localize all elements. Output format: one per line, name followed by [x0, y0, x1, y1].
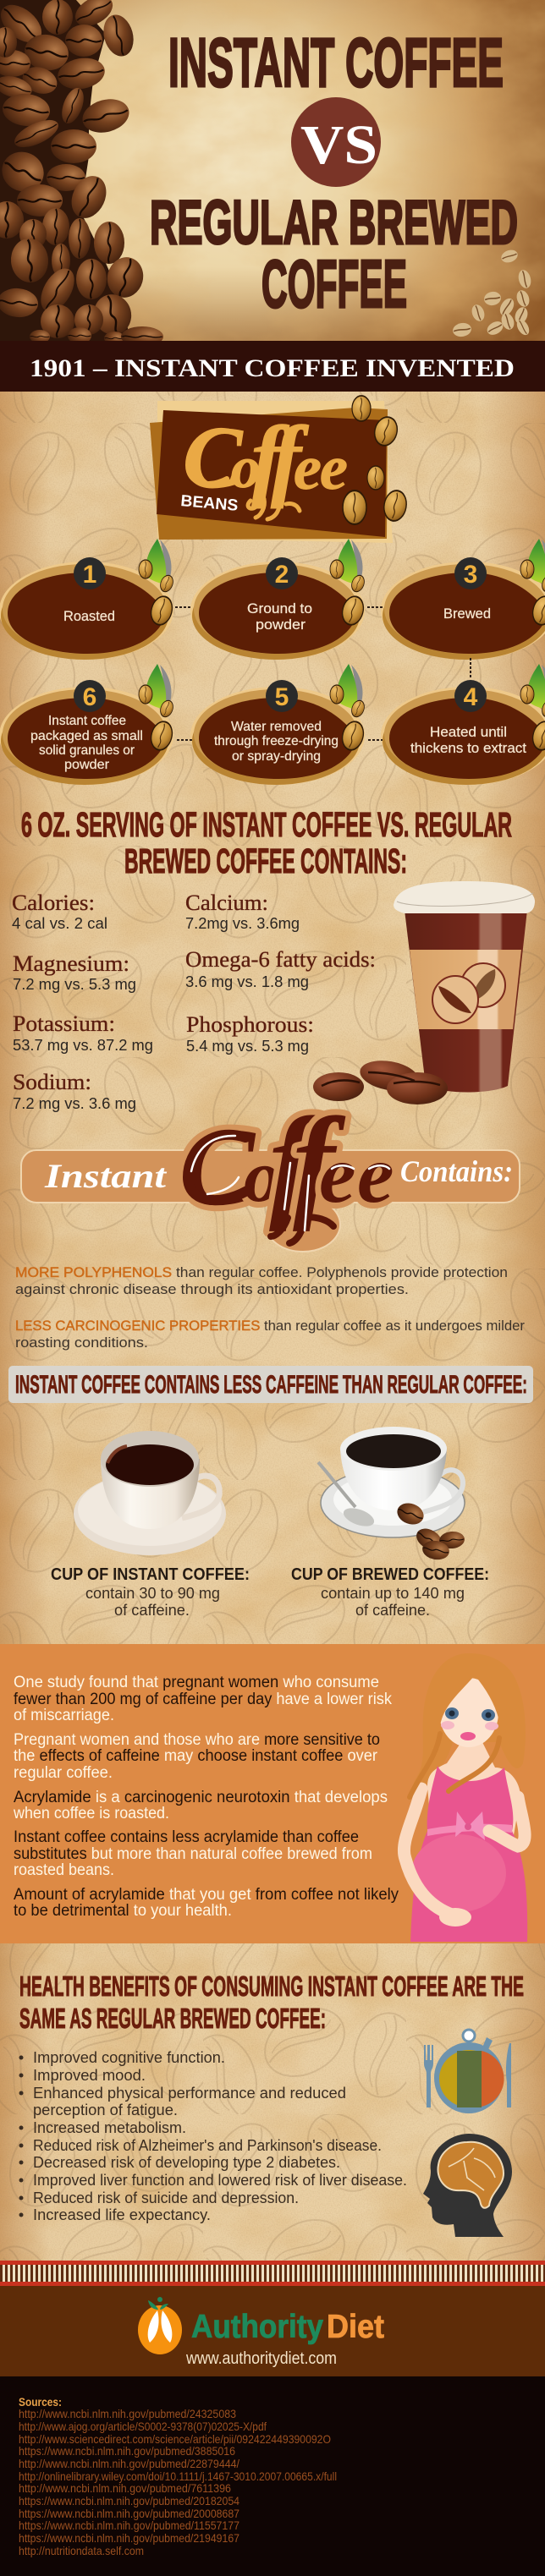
vs badge: VS [300, 114, 377, 176]
step 6: powder [64, 758, 110, 772]
health benefits list [19, 2049, 407, 2223]
step 5: through freeze-drying [214, 734, 339, 748]
pregnancy text: Instant coffee contains less acrylamide than coffee [14, 1828, 359, 1846]
step 4: thickens to extract [410, 741, 526, 756]
brewed cup caption: of caffeine. [355, 1602, 430, 1619]
nutrient: potassium: Potassium: [13, 1011, 115, 1036]
pregnancy text: Pregnant women and those who are more sensitive to [14, 1731, 380, 1749]
health benefits list: Improved liver function and lowered risk of liver disease. [33, 2172, 407, 2189]
nutrient: phosphorous: 5.4 mg vs. 5.3 mg [186, 1038, 309, 1055]
nutrient: magnesium [13, 951, 136, 993]
polyphenols text [15, 1264, 508, 1297]
polyphenols text: against chronic disease through its antioxidant properties. [15, 1281, 409, 1297]
pregnancy text [13, 1674, 399, 1920]
health benefits list: Improved cognitive function. [33, 2049, 225, 2066]
nutrient: phosphorous: Phosphorous: [186, 1012, 314, 1037]
carcinogenic text [15, 1318, 525, 1351]
pregnancy text: Amount of acrylamide that you get from coffee not likely [14, 1886, 399, 1904]
big coffee lettering: f [269, 1092, 322, 1232]
step connectors [175, 607, 471, 740]
sources block: http://www.ajog.org/article/S0002-9378(07)02025-X/pdf [19, 2420, 267, 2433]
step 5: Water removed [231, 720, 322, 734]
health benefits list: Reduced risk of Alzheimer's and Parkinson's disease. [33, 2137, 382, 2154]
brewed cup caption [291, 1565, 489, 1619]
polyphenols text: MORE POLYPHENOLS than regular coffee. Polyphenols provide protection [15, 1264, 508, 1280]
nutrient: calories: Calories: [12, 891, 95, 915]
carcinogenic text: roasting conditions. [15, 1335, 148, 1351]
nutrient: calcium [185, 891, 300, 932]
sources block: https://www.ncbi.nlm.nih.gov/pubmed/3885016 [19, 2444, 235, 2458]
nutrient: calories: 4 cal vs. 2 cal [12, 915, 107, 932]
coffee script lettering: e [294, 434, 322, 503]
nutrient: calcium: 7.2mg vs. 3.6mg [185, 915, 300, 932]
nutrient: omega-6 [185, 947, 376, 990]
instant coffee contains banner [21, 1092, 520, 1252]
beans label: BEANS [180, 492, 239, 515]
title [150, 25, 518, 321]
footer brand band [0, 2286, 545, 2376]
sources block: http://www.ncbi.nlm.nih.gov/pubmed/7611396 [19, 2481, 231, 2495]
coffee beans pile [0, 0, 163, 347]
nutrient: omega-6: Omega-6 fatty acids: [185, 947, 376, 972]
pregnant woman illustration [404, 1653, 527, 1942]
vs badge [291, 97, 381, 187]
sources block [0, 2376, 545, 2576]
nutrient: omega-6: 3.6 mg vs. 1.8 mg [185, 973, 309, 990]
step 2: powder [256, 617, 306, 633]
nutrient: potassium: 53.7 mg vs. 87.2 mg [13, 1037, 153, 1054]
health benefits list: Enhanced physical performance and reduced [33, 2085, 346, 2102]
brewed cup caption: contain up to 140 mg [321, 1585, 465, 1602]
step 5: or spray-drying [232, 749, 321, 764]
step 6: packaged as small [30, 729, 143, 743]
big coffee lettering [180, 1092, 394, 1243]
nutrition heading [21, 805, 512, 880]
step 3: 3 [464, 561, 477, 589]
decorative stripe band [0, 2261, 545, 2286]
step 4: Heated until [430, 725, 507, 740]
nutrient: sodium: 7.2 mg vs. 3.6 mg [13, 1095, 136, 1112]
coffee script lettering: C [184, 409, 244, 507]
website url: www.authoritydiet.com [185, 2349, 337, 2368]
big coffee lettering: C [180, 1104, 256, 1229]
faded beans decoration [452, 248, 533, 338]
step 3 [381, 539, 545, 660]
step 1 [0, 539, 175, 660]
step 1: Roasted [63, 608, 115, 624]
coffee script lettering: f [271, 408, 309, 509]
coffee script lettering: f [251, 408, 289, 509]
pregnancy text: when coffee is roasted. [13, 1805, 169, 1822]
instant coffee cup [74, 1431, 226, 1555]
coffee script lettering [184, 408, 348, 519]
nutrient: magnesium: Magnesium: [13, 951, 129, 976]
takeaway cup illustration [313, 881, 535, 1104]
coffee script lettering: o [231, 436, 261, 501]
instant label: Instant [44, 1157, 168, 1195]
instant cup caption: CUP OF INSTANT COFFEE: [51, 1565, 250, 1584]
pregnancy text: the effects of caffeine may choose instant coffee over [14, 1747, 378, 1765]
step 5: 5 [275, 683, 289, 711]
step 2 [190, 539, 366, 660]
instant cup caption [51, 1565, 250, 1619]
big coffee lettering: e [319, 1129, 355, 1220]
step 2: 2 [275, 561, 289, 589]
step 3: Brewed [443, 606, 491, 622]
sources block: http://nutritiondata.self.com [19, 2544, 144, 2557]
pregnancy text: fewer than 200 mg of caffeine per day have a lower risk [14, 1691, 392, 1708]
brewed coffee cup [318, 1427, 465, 1562]
big coffee lettering: f [293, 1092, 346, 1232]
coffee script lettering: e [320, 434, 348, 503]
step 4: 4 [464, 683, 478, 711]
nutrient: sodium [13, 1070, 136, 1112]
big coffee lettering: o [244, 1136, 281, 1218]
pregnancy text: regular coffee. [14, 1764, 113, 1782]
sources block: http://www.ncbi.nlm.nih.gov/pubmed/22879444/ [19, 2457, 239, 2470]
pregnancy text: One study found that pregnant women who consume [14, 1674, 379, 1691]
step 6: 6 [83, 683, 96, 711]
health benefits list: Increased life expectancy. [33, 2206, 211, 2223]
step 4 [381, 664, 545, 785]
nutrient: calories [12, 891, 107, 932]
title: COFFEE [261, 246, 407, 321]
logo mark [138, 2297, 182, 2354]
logo wordmark: Authority [191, 2309, 323, 2345]
step 5 [190, 664, 366, 785]
instant cup caption: of caffeine. [114, 1602, 190, 1619]
brewed cup caption: CUP OF BREWED COFFEE: [291, 1565, 489, 1584]
instant cup caption: contain 30 to 90 mg [85, 1585, 220, 1602]
sources block: https://www.ncbi.nlm.nih.gov/pubmed/20008687 [19, 2507, 239, 2520]
step 6 [0, 664, 175, 785]
step 6: solid granules or [39, 743, 135, 758]
pregnancy text: substitutes but more than natural coffee brewed from [14, 1845, 372, 1863]
sources block: https://www.ncbi.nlm.nih.gov/pubmed/21949167 [19, 2531, 239, 2545]
page paper background [0, 392, 545, 2262]
nutrient: sodium: Sodium: [13, 1070, 91, 1094]
health benefits list: Increased metabolism. [33, 2119, 186, 2136]
nutrient: magnesium: 7.2 mg vs. 5.3 mg [13, 976, 136, 993]
pregnancy panel [0, 1644, 545, 1943]
carcinogenic text: LESS CARCINOGENIC PROPERTIES than regular coffee as it undergoes milder [15, 1318, 525, 1334]
contains label: Contains: [400, 1154, 513, 1188]
date band: 1901 – INSTANT COFFEE INVENTED [30, 354, 515, 382]
pregnancy text: of miscarriage. [14, 1707, 114, 1724]
sources block: http://www.ncbi.nlm.nih.gov/pubmed/24325083 [19, 2407, 236, 2420]
pregnancy text: Acrylamide is a carcinogenic neurotoxin that develops [14, 1789, 388, 1806]
header background [0, 0, 545, 342]
sources block: https://www.ncbi.nlm.nih.gov/pubmed/20182054 [19, 2494, 239, 2507]
pregnancy text: to be detrimental to your health. [14, 1902, 232, 1920]
step 2: Ground to [247, 600, 312, 617]
coffee beans banner [150, 396, 409, 543]
sources block: http://onlinelibrary.wiley.com/doi/10.1111/j.1467-3010.2007.00665.x/full [19, 2469, 337, 2483]
step 6: Instant coffee [48, 714, 126, 728]
sources block: https://www.ncbi.nlm.nih.gov/pubmed/11557177 [19, 2518, 239, 2532]
footer brand band: Diet [327, 2309, 384, 2345]
big coffee lettering: e [357, 1129, 394, 1220]
health heading: SAME AS REGULAR BREWED COFFEE: [19, 2003, 326, 2034]
sources block: Sources: [19, 2395, 62, 2409]
nutrient: calcium: Calcium: [185, 891, 268, 915]
nutrient: phosphorous [186, 1012, 314, 1055]
health benefits list: Improved mood. [33, 2067, 146, 2084]
health benefits list: Reduced risk of suicide and depression. [33, 2190, 299, 2206]
nutrient: potassium [13, 1011, 153, 1054]
icon: head with brain [423, 2134, 512, 2237]
date band [0, 341, 545, 392]
sources block: http://www.sciencedirect.com/science/article/pii/092422449390092O [19, 2432, 331, 2446]
health heading [19, 1970, 524, 2034]
health benefits list: perception of fatigue. [33, 2102, 178, 2118]
step 1: 1 [83, 561, 96, 589]
pregnancy text: roasted beans. [14, 1861, 114, 1879]
icon: plate with cutlery [424, 2030, 511, 2113]
health benefits list: Decreased risk of developing type 2 diabetes. [33, 2154, 340, 2171]
